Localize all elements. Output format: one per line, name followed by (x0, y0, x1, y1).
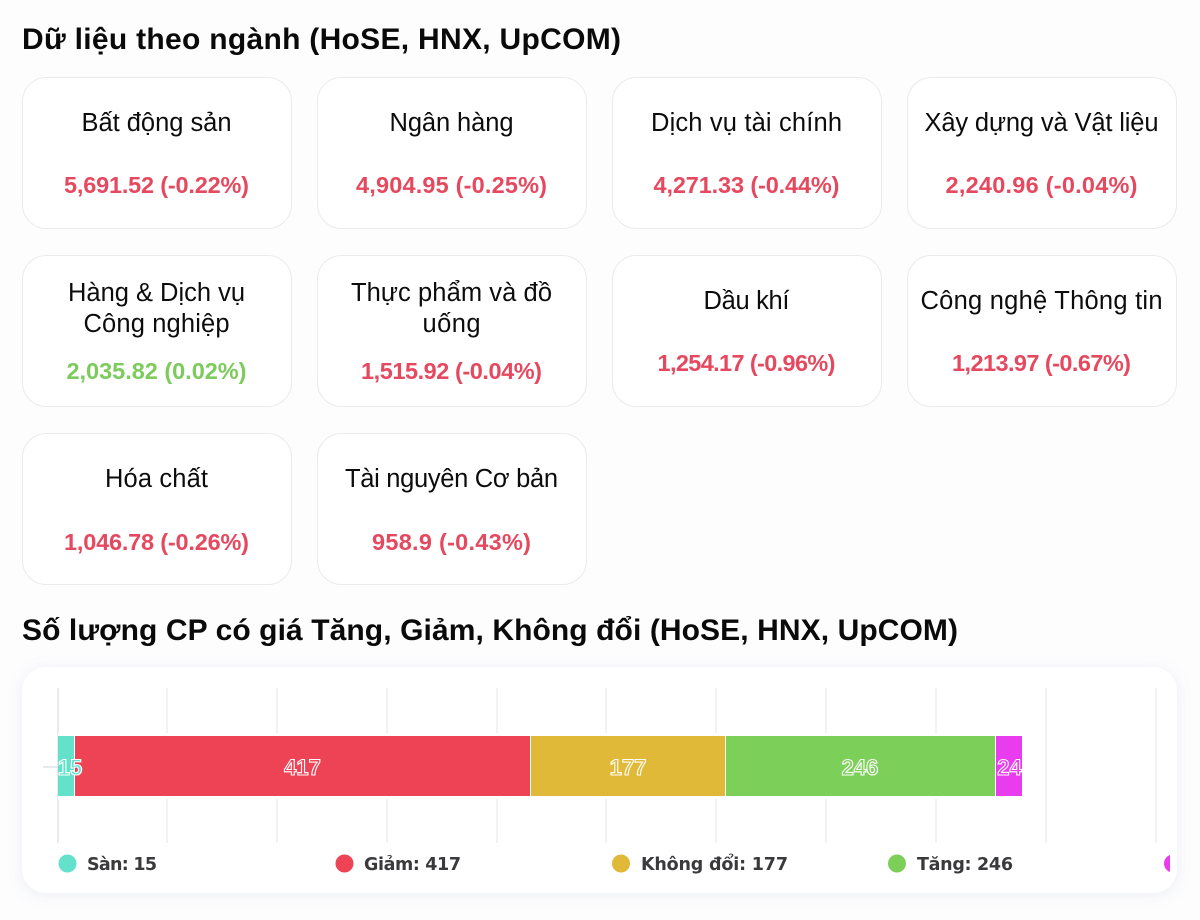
legend item: Giảm (336, 854, 460, 872)
card: Dịch vụ tài chính (612, 78, 882, 228)
card: Xây dựng và Vật liệu (908, 78, 1176, 228)
card: Xây dựng và Vật liệu: Xây dựng và Vật liệu (924, 109, 1158, 137)
bar: Trần 24 (996, 736, 1022, 796)
card: Tài nguyên Cơ bản (318, 434, 586, 584)
card: Hóa chất: 1,046.78 (-0.26%) (64, 529, 249, 555)
legend item: Giảm: Giảm: 417 (364, 855, 461, 875)
card: Bất động sản (22, 78, 292, 228)
bar: Không đổi 177: 177 (610, 755, 646, 780)
card: Thực phẩm và đồ uống: uống (422, 310, 480, 338)
bar: Sàn 15: 15 (58, 755, 82, 780)
title: sector data: Dữ liệu theo ngành (HoSE, HNX, UpCOM) (22, 23, 621, 56)
legend item: Không đổi: Không đổi: 177 (641, 853, 788, 875)
bar: Tăng 246: 246 (842, 755, 878, 780)
card: Dầu khí: 1,254.17 (-0.96%) (658, 350, 836, 376)
bar: Trần 24: 24 (997, 755, 1022, 780)
panel: stacked bar chart (22, 667, 1182, 893)
card: Tài nguyên Cơ bản: Tài nguyên Cơ bản (345, 465, 558, 493)
card: Dầu khí (612, 256, 882, 406)
legend item: Tăng: Tăng: 246 (917, 855, 1013, 875)
legend item: Sàn (58, 854, 156, 872)
card: Công nghệ Thông tin (908, 256, 1176, 406)
card: Hàng & Dịch vụ Công nghiệp: Công nghiệp (84, 310, 230, 338)
card: Hàng & Dịch vụ Công nghiệp (22, 256, 292, 406)
card: Thực phẩm và đồ uống (318, 256, 586, 406)
card: Dầu khí: Dầu khí (704, 287, 790, 315)
card: Xây dựng và Vật liệu: 2,240.96 (-0.04%) (946, 172, 1138, 198)
card: Ngân hàng: Ngân hàng (390, 109, 514, 137)
bar: Giảm 417 (75, 736, 530, 796)
card: Bất động sản: 5,691.52 (-0.22%) (64, 172, 249, 198)
card: Dịch vụ tài chính: 4,271.33 (-0.44%) (654, 172, 840, 198)
card: Bất động sản: Bất động sản (82, 109, 232, 137)
card: Hóa chất (22, 434, 292, 584)
legend item: clipped (1164, 855, 1170, 872)
card: Công nghệ Thông tin: Công nghệ Thông tin (920, 287, 1162, 315)
card: Hóa chất: Hóa chất (105, 465, 208, 493)
bar: Không đổi 177 (531, 736, 725, 796)
card: Dịch vụ tài chính: Dịch vụ tài chính (651, 109, 842, 137)
bar: Tăng 246 (726, 736, 995, 796)
card: Thực phẩm và đồ uống: 1,515.92 (-0.04%) (361, 358, 542, 384)
card: Hàng & Dịch vụ Công nghiệp: Hàng & Dịch vụ (68, 279, 245, 307)
card: Công nghệ Thông tin: 1,213.97 (-0.67%) (952, 350, 1131, 376)
card: Hàng & Dịch vụ Công nghiệp: 2,035.82 (0.02%) (66, 358, 246, 384)
card: Thực phẩm và đồ uống: Thực phẩm và đồ (351, 279, 552, 307)
legend item: Sàn: Sàn: 15 (87, 855, 157, 875)
legend (58, 854, 1170, 874)
card: Tài nguyên Cơ bản: 958.9 (-0.43%) (372, 529, 531, 555)
card: Ngân hàng: 4,904.95 (-0.25%) (356, 172, 547, 198)
card: Ngân hàng (318, 78, 586, 228)
bar: Giảm 417: 417 (284, 755, 321, 780)
title: stock counts: Số lượng CP có giá Tăng, Giảm, Không đổi (HoSE, HNX, UpCOM) (22, 614, 958, 647)
bar: Sàn 15 (58, 736, 82, 796)
